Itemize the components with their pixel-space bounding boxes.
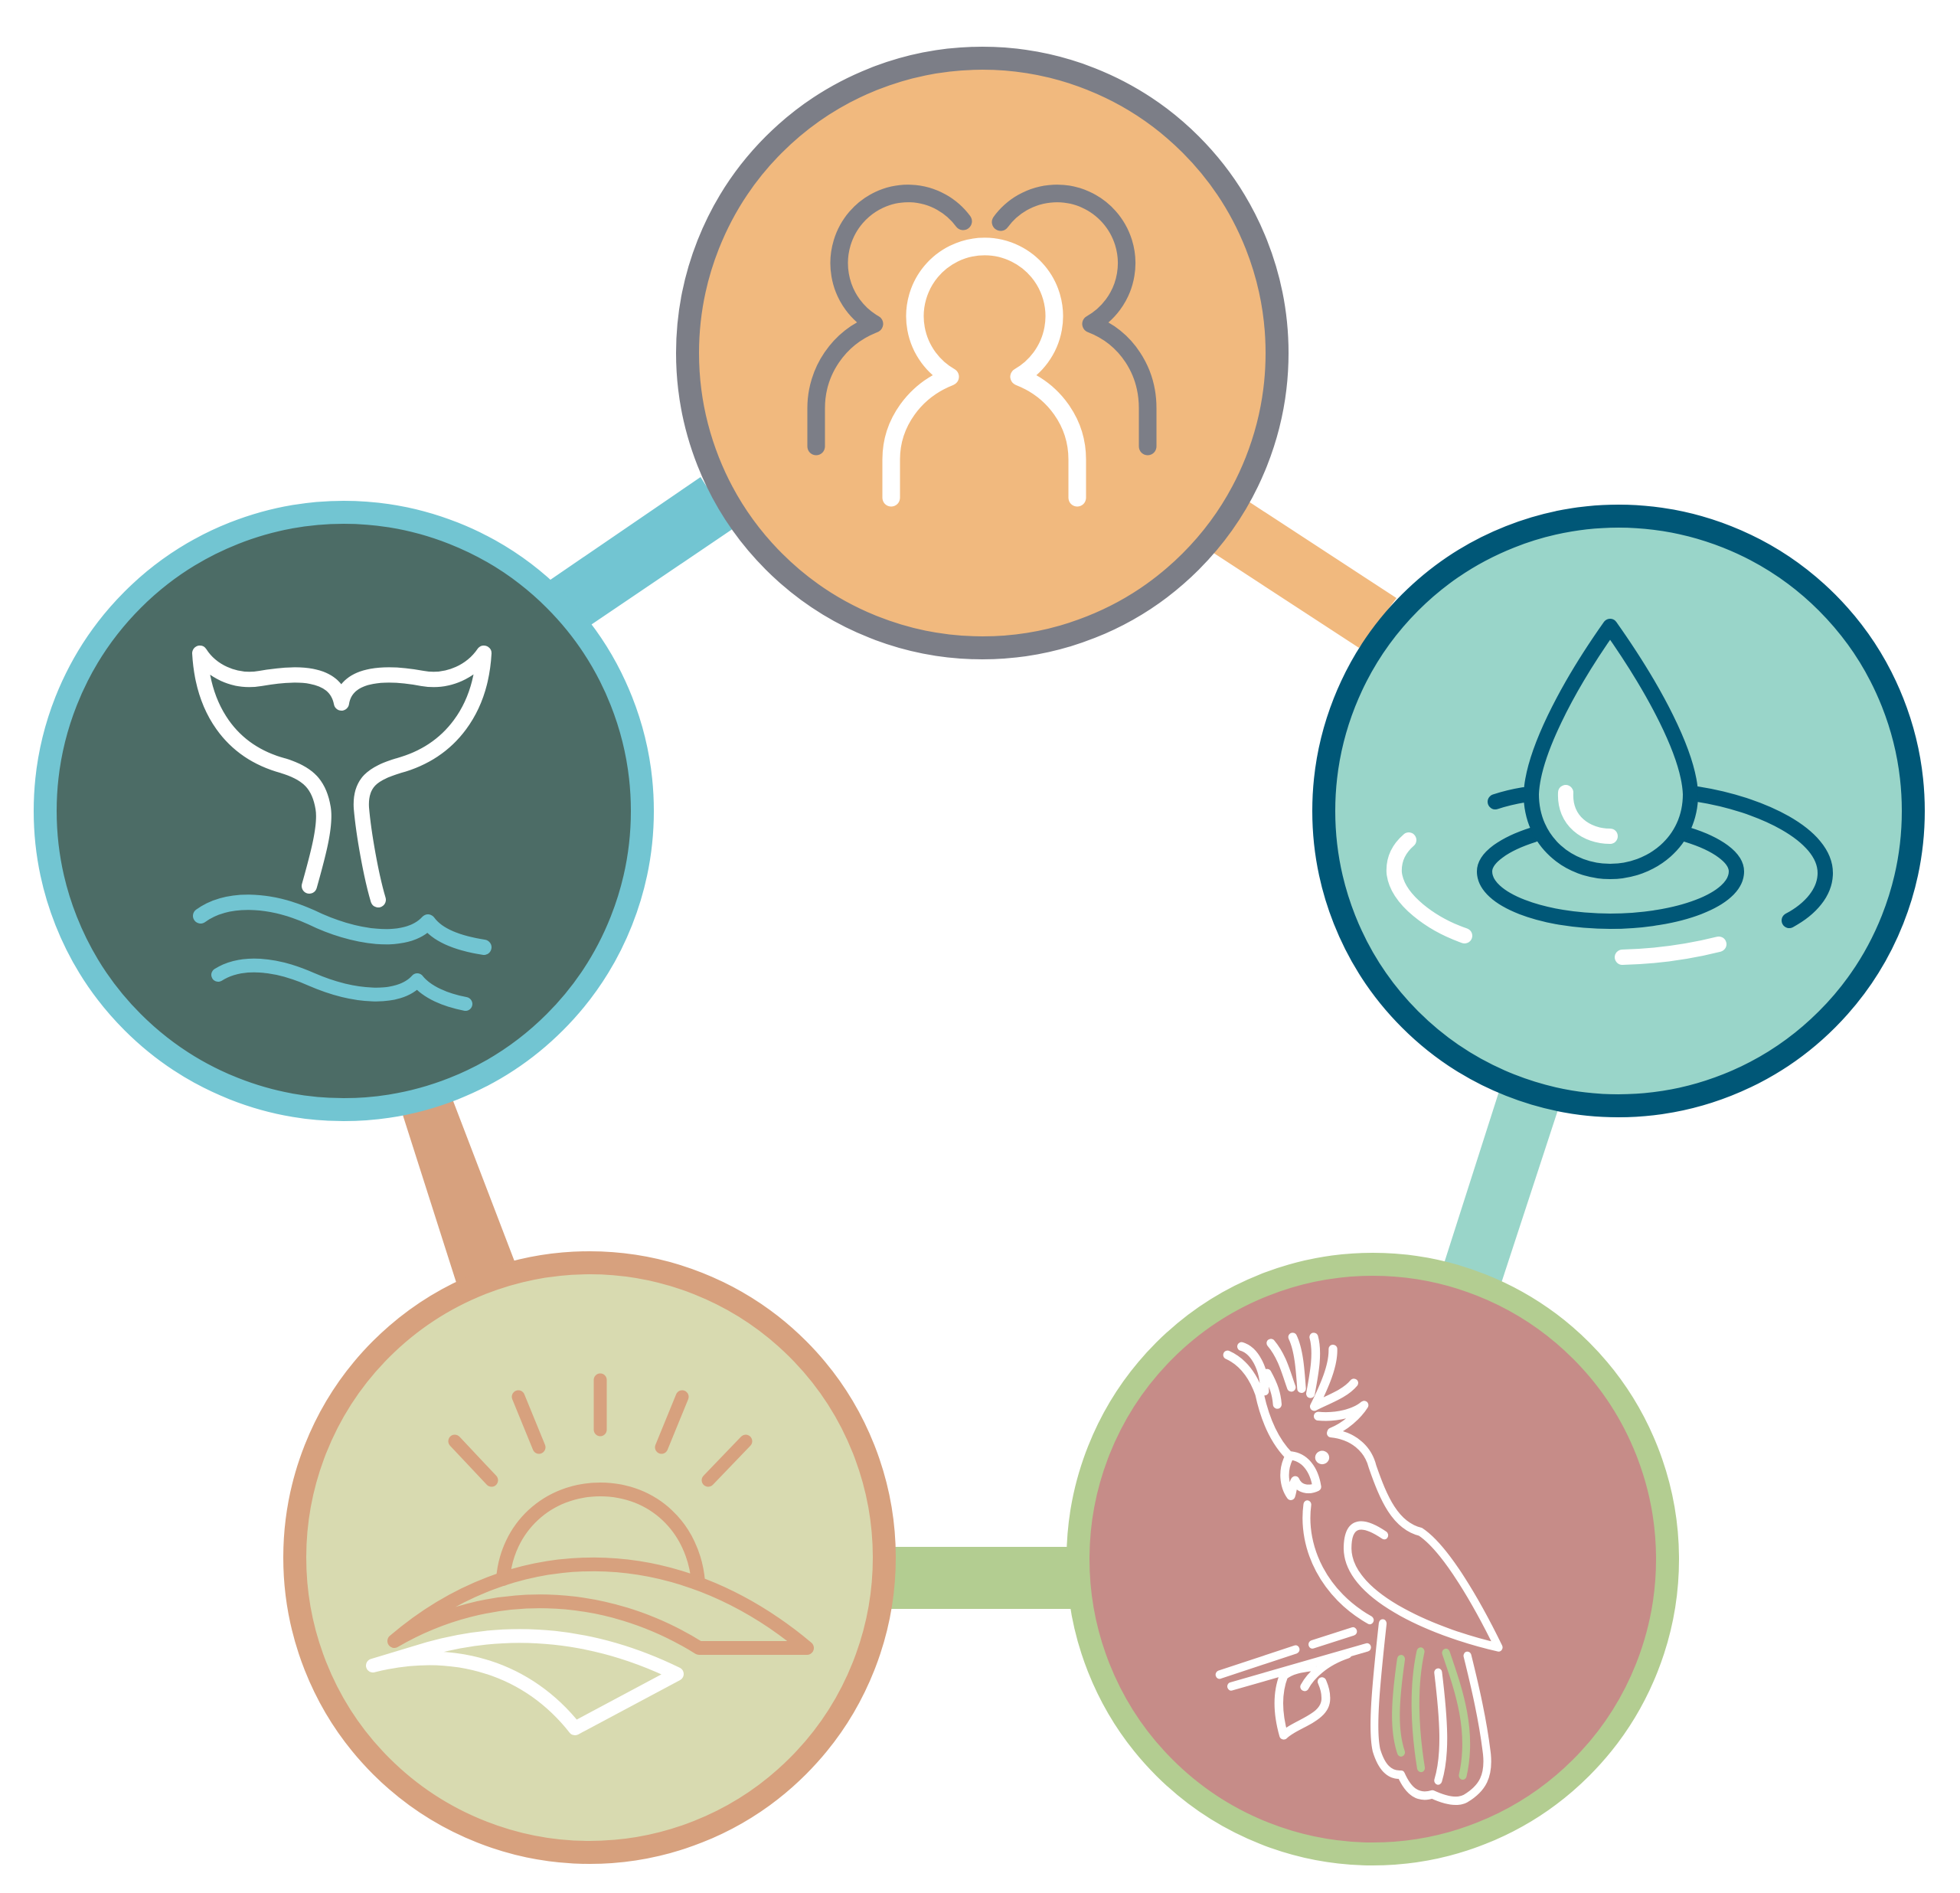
icon part: drop outline [1531,626,1690,871]
icon: cockatoo on branch [1220,1337,1498,1801]
icon part: body, wing, tail and branch [1220,1434,1498,1801]
icon part: left grey person [816,194,963,446]
connector: mint, water to cockatoo [1444,1091,1559,1283]
icon part: whale tail [200,653,484,900]
icon part: outer ripple stubs [1495,794,1825,920]
icon part: upper wave [201,902,484,947]
panel: cockatoo circle [1078,1264,1668,1854]
panel: land circle [295,1263,884,1852]
icon part: right grey person [1001,194,1148,446]
icon part: white front hill [373,1636,677,1728]
icon part: green tail feathers [1396,1652,1466,1776]
panel: water circle [1324,516,1913,1106]
icon: whale tail and waves [200,653,484,1004]
icon part: white highlights [1394,793,1719,957]
icon part: back hill [394,1564,807,1648]
icon part: branch [1220,1631,1367,1686]
icon part: bird back, wing and chest [1306,1434,1498,1647]
connector: orange, people to water [1214,502,1396,648]
connector: tan, land to whale [387,1064,514,1283]
icon: three people [816,194,1148,498]
connector: teal, whale to people [536,477,733,631]
icon part: lower wave [218,966,466,1004]
icon: sun over hills [373,1380,807,1728]
panel: whale circle [45,512,642,1110]
icon part: sun dome [503,1489,698,1582]
icon part: foot [1279,1654,1348,1735]
icon part: inner ripple [1485,835,1736,921]
icon: water drop with ripples [1394,626,1825,957]
icon part: eye [1315,1451,1329,1464]
panel: people circle [688,58,1277,648]
icon part: crest, head and beak [1227,1337,1364,1496]
icon part: tail outline [1374,1623,1488,1801]
icon part: sun rays [455,1380,746,1480]
icon part: front white person [891,247,1077,498]
connector: green, cockatoo to land [880,1547,1081,1609]
